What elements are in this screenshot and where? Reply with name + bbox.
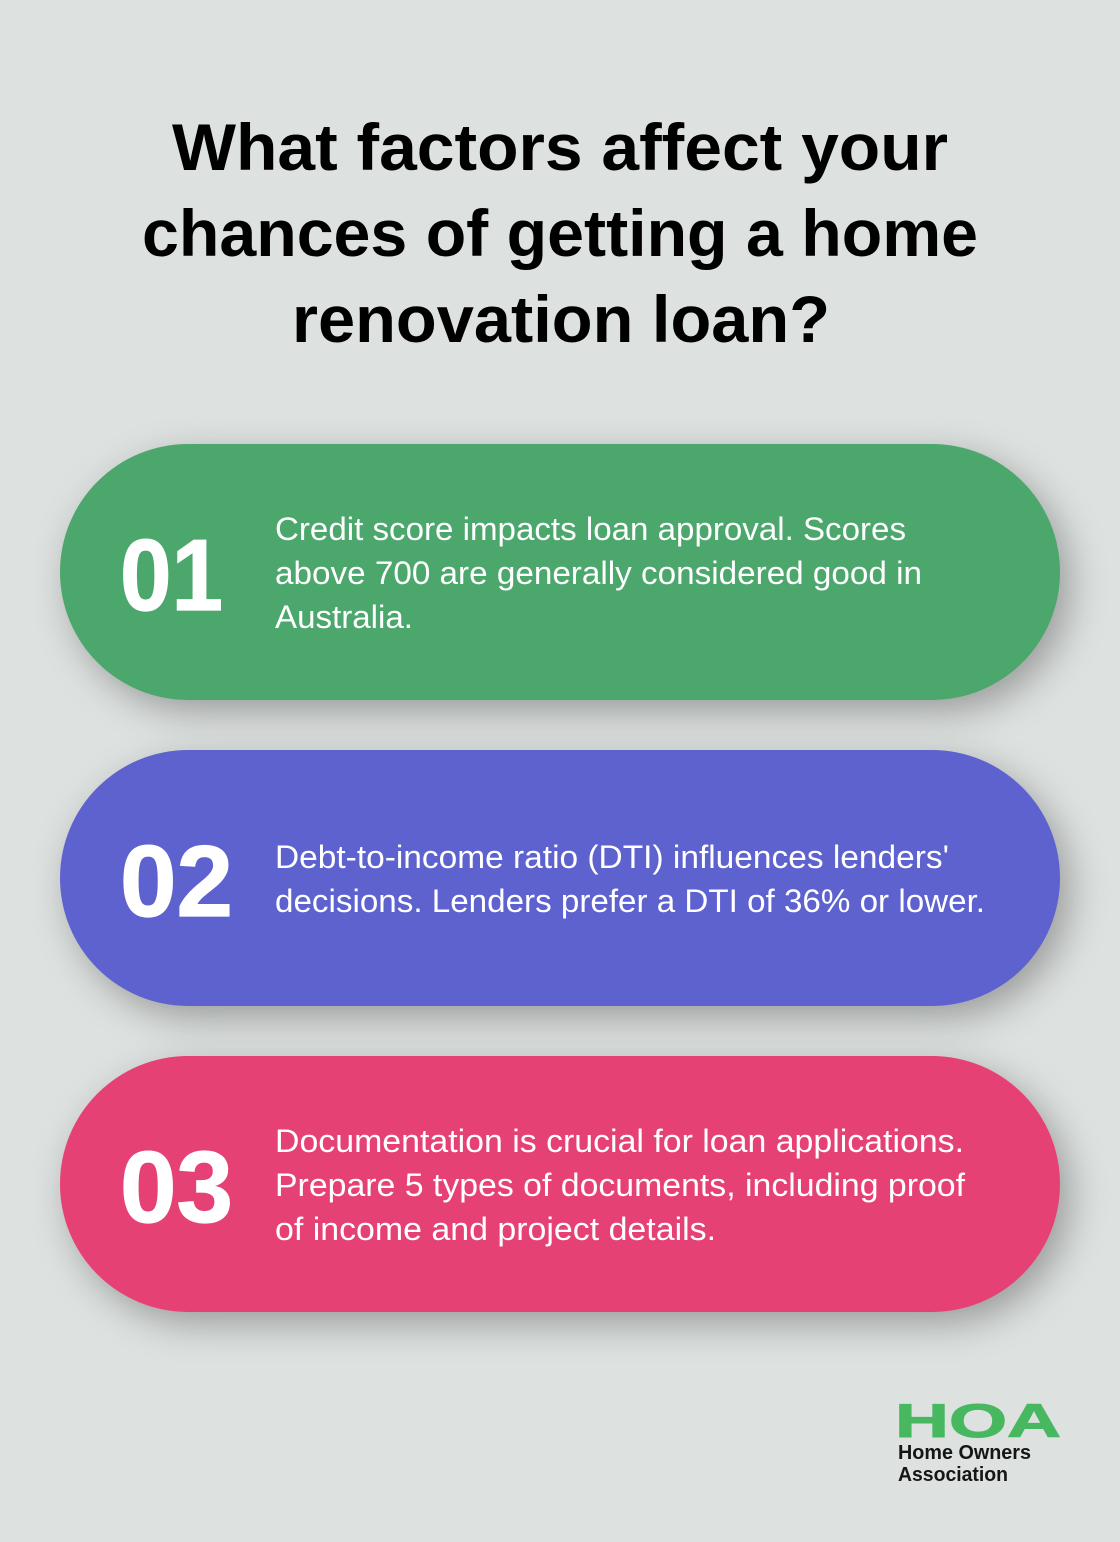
documentation text: Documentation is crucial for loan applications. xyxy=(275,1123,964,1159)
documentation text xyxy=(275,1123,965,1247)
pink pill background xyxy=(60,1056,1060,1312)
debt-to-income text: Debt-to-income ratio (DTI) influences lenders' xyxy=(275,839,949,875)
logo tagline: Association xyxy=(898,1464,1008,1486)
title: chances of getting a home xyxy=(142,196,978,270)
logo tagline xyxy=(898,1442,1031,1486)
credit score text: Credit score impacts loan approval. Scores xyxy=(275,511,906,547)
panel: credit score xyxy=(60,444,1060,700)
documentation text: Prepare 5 types of documents, including proof xyxy=(275,1167,965,1203)
debt-to-income text: decisions. Lenders prefer a DTI of 36% or lower. xyxy=(275,883,985,919)
number 03: 03 xyxy=(120,1132,233,1244)
green pill background xyxy=(60,444,1060,700)
title: What factors affect your xyxy=(172,110,948,184)
debt-to-income text xyxy=(275,839,985,919)
panel: debt-to-income ratio xyxy=(60,750,1060,1006)
documentation text: of income and project details. xyxy=(275,1211,716,1247)
logo tagline: Home Owners xyxy=(898,1442,1031,1464)
credit score text: above 700 are generally considered good in xyxy=(275,555,922,591)
credit score text: Australia. xyxy=(275,599,413,635)
number 02: 02 xyxy=(120,826,233,938)
logo wordmark HOA: HOA xyxy=(895,1394,1061,1447)
title: renovation loan? xyxy=(292,282,830,356)
logo: Home Owners Association xyxy=(895,1394,1061,1486)
title xyxy=(142,110,978,356)
number 01: 01 xyxy=(120,520,223,632)
panel: documentation xyxy=(60,1056,1060,1312)
credit score text xyxy=(275,511,922,635)
blue pill background xyxy=(60,750,1060,1006)
